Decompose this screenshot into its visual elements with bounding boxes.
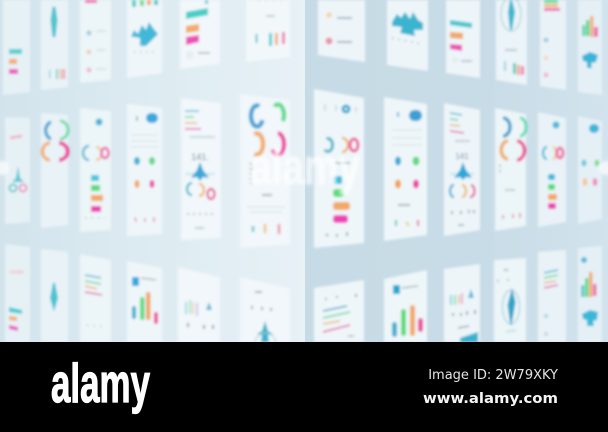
card: row 2 column 10: [495, 108, 526, 231]
card: row 2 column 2: [41, 113, 68, 228]
blurred scene of app screen cards on two walls: [0, 0, 608, 342]
card: row 2 column 7: [314, 89, 364, 248]
card: row 2 column 3: [80, 108, 111, 232]
card: row 2 column 9: [444, 103, 480, 236]
card: row 3 column 7: [314, 280, 364, 342]
card: row 3 column 12: [578, 246, 602, 342]
card: row 1 column 8: [387, 0, 428, 71]
panel: left wall cards: [3, 0, 290, 342]
panel: right wall cards: [314, 0, 602, 342]
readout: 141: 141.: [191, 152, 209, 162]
card: row 1 column 4: [127, 0, 162, 78]
website url: www.alamy.com: [423, 391, 558, 407]
card: row 3 column 9: [444, 264, 480, 342]
card: row 1 column 9: [446, 0, 480, 78]
card: row 1 column 3: [80, 0, 111, 83]
card: row 2 column 12: [578, 116, 602, 224]
card: row 3 column 2: [41, 249, 68, 342]
card: row 3 column 6: [240, 277, 290, 342]
card: row 3 column 4: [127, 261, 162, 342]
card: row 1 column 6: [246, 0, 290, 62]
logo: alamy: alamy: [51, 352, 150, 414]
card: row 1 column 1: [3, 0, 30, 95]
card: row 2 column 8: [384, 97, 427, 241]
image id: Image ID: 2W79XKY: [428, 368, 558, 383]
card: row 2 column 1: [5, 117, 30, 224]
card: row 2 column 5: [181, 98, 221, 240]
card: row 3 column 11: [538, 250, 566, 342]
footer band: [0, 342, 608, 432]
card: row 3 column 10: [494, 258, 526, 342]
card: row 1 column 5: [180, 0, 220, 69]
right wall background: [305, 0, 608, 342]
watermark: faint alamy: [0, 139, 608, 195]
card: row 2 column 6: [240, 94, 290, 248]
readout: 141: 141: [455, 152, 469, 161]
card: row 3 column 5: [178, 267, 220, 342]
card: row 1 column 12: [578, 0, 602, 95]
card: row 2 column 11: [538, 112, 566, 227]
card: row 2 column 4: [127, 104, 162, 236]
card: row 1 column 10: [496, 0, 527, 85]
left wall background: [0, 0, 305, 342]
card: row 1 column 7: [318, 0, 365, 62]
watermark: faint alamy: alamy: [250, 139, 360, 195]
card: row 3 column 8: [384, 270, 427, 342]
card: row 1 column 2: [41, 0, 68, 90]
card: row 3 column 1: [5, 244, 30, 342]
card: row 3 column 3: [80, 254, 111, 342]
card: row 1 column 11: [540, 0, 566, 90]
